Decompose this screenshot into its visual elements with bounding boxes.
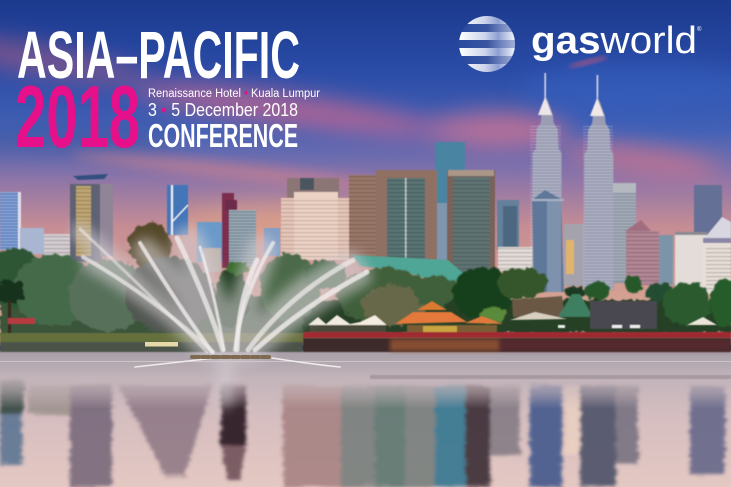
fountain water jets	[80, 229, 367, 352]
right buildings	[613, 183, 731, 294]
left tower	[530, 73, 564, 292]
grass bank	[0, 333, 303, 343]
green roofed hall	[352, 255, 470, 283]
tree line	[0, 223, 731, 337]
event title	[15, 18, 320, 166]
icon: striped globe	[459, 16, 515, 72]
fountain spray haze	[80, 232, 362, 400]
left buildings	[0, 174, 280, 272]
heading: 2018: 2018	[15, 67, 140, 166]
city skyline	[0, 73, 731, 294]
fountain base and surface streaks	[135, 357, 340, 367]
central towers	[281, 142, 543, 274]
gasworld logo	[459, 16, 702, 72]
heading: Asia-Pacific: ASIA–PACIFIC	[17, 18, 300, 93]
sky background	[0, 0, 731, 345]
heading: conference: CONFERENCE	[148, 118, 298, 155]
right tower	[583, 75, 614, 290]
white tents	[308, 315, 387, 325]
wordmark: gasworld	[531, 20, 697, 62]
lakeside pavilions and deck	[8, 294, 731, 338]
orange pavilion	[395, 301, 503, 333]
dates: 3 • 5 December 2018	[148, 100, 298, 120]
water reflections	[0, 380, 725, 487]
lake water	[0, 338, 731, 487]
venue: Renaissance Hotel • Kuala Lumpur	[148, 88, 320, 100]
Petronas towers	[530, 73, 614, 292]
registered mark: ®	[697, 26, 702, 33]
fountain	[80, 229, 367, 400]
